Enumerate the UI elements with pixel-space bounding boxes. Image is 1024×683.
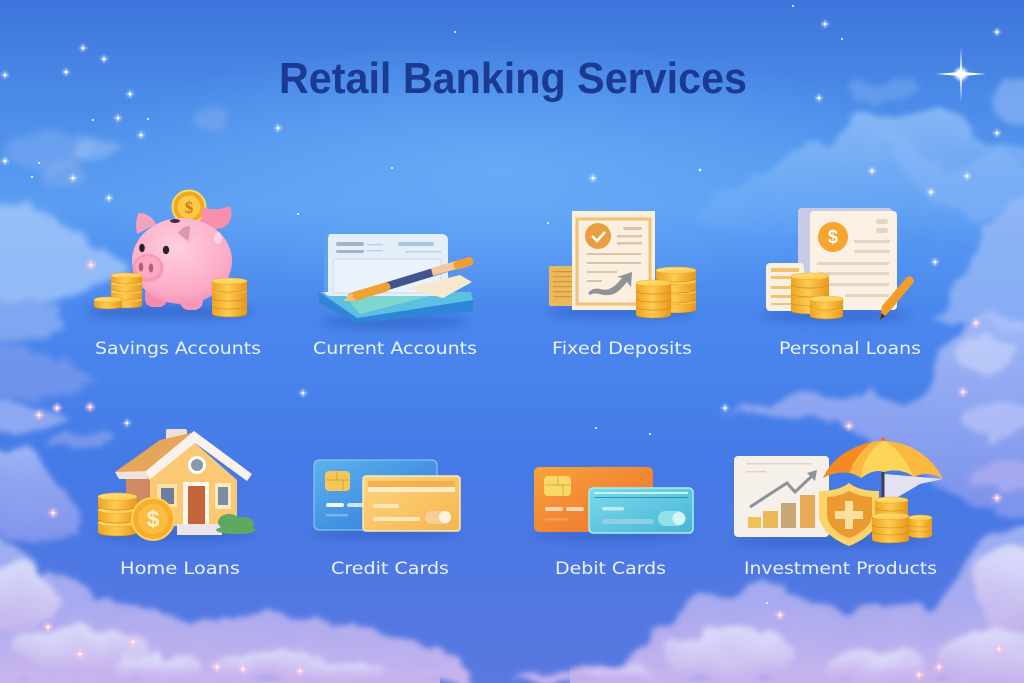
clouds: lower right xyxy=(510,525,1024,683)
label: Credit Cards: Credit Cards xyxy=(331,559,449,579)
label: Investment Products: Investment Products xyxy=(744,559,937,579)
clouds: lower left xyxy=(0,525,480,683)
clouds: left side xyxy=(0,398,119,545)
icon: personal loan document and coins: $ xyxy=(828,227,838,247)
label: Savings Accounts: Savings Accounts xyxy=(95,339,261,359)
icon: investment chart, umbrella, shield and coins xyxy=(730,437,943,547)
label: Home Loans: Home Loans xyxy=(120,559,240,579)
clouds: bottom edge fill xyxy=(0,665,1024,683)
title: Retail Banking Services xyxy=(279,54,747,103)
icon: cheque book and pen xyxy=(319,234,473,329)
icon: credit cards xyxy=(310,460,460,539)
icon: piggy bank with coins xyxy=(85,190,255,319)
label: Fixed Deposits: Fixed Deposits xyxy=(552,339,692,359)
icon: debit cards xyxy=(534,467,693,541)
icon: piggy bank with coins: $ xyxy=(185,198,194,217)
icon: house with coins: $ xyxy=(147,506,160,532)
icon: house with coins xyxy=(95,429,256,541)
clouds: upper right xyxy=(690,80,1024,330)
icon: personal loan document and coins xyxy=(760,208,914,322)
label: Current Accounts: Current Accounts xyxy=(313,339,477,359)
clouds: upper left xyxy=(0,108,228,400)
label: Personal Loans: Personal Loans xyxy=(779,339,921,359)
clouds: right side xyxy=(720,319,1024,515)
label: Debit Cards: Debit Cards xyxy=(555,559,666,579)
icon: fixed deposit certificate and coins xyxy=(545,211,696,319)
